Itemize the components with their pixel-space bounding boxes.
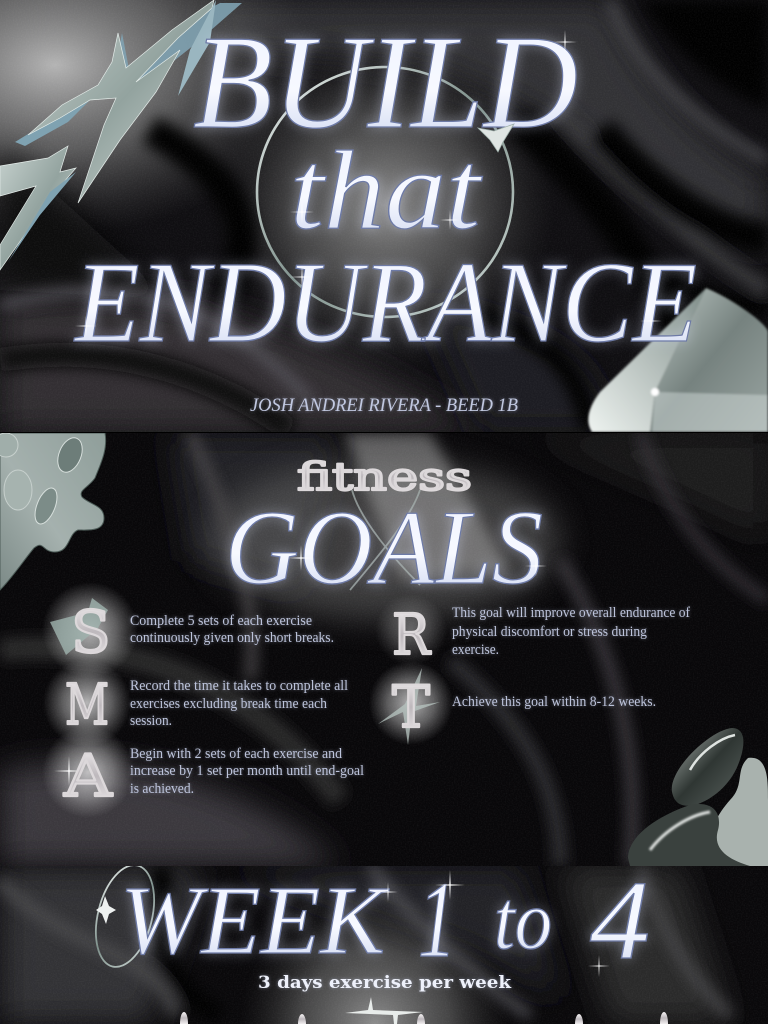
satin background [0,433,768,866]
goal M: measurable: Record the time it takes to complete all [130,678,348,694]
panel: fitness goals [0,433,768,866]
goal R: relevant: exercise. [452,642,499,658]
goal A: achievable: is achieved. [130,781,194,797]
heading: BUILD: BUILD [193,8,578,156]
goal M: measurable: M [65,673,109,738]
panel: title cover [0,0,768,432]
goal M: measurable: session. [130,713,172,729]
goal M: measurable [43,659,348,747]
exercise figures tips [180,1012,668,1024]
goal A: achievable: Begin with 2 sets of each exercise and [130,746,343,762]
icon: chrome lightning sculpture [0,0,242,270]
goal S: specific: S [71,598,111,666]
goal A: achievable: increase by 1 set per month until end-goal [130,763,364,779]
goal T: time-bound: Achieve this goal within 8-12 weeks. [452,694,656,710]
heading: WEEK 1 to 4: 4 [590,859,650,983]
icon: chrome clover [628,728,768,866]
goal S: specific [42,582,334,678]
goal A: achievable: A [63,742,113,810]
goal T: time-bound [369,661,656,745]
heading: GOALS: GOALS [225,489,543,606]
icon: chrome cube [588,288,768,432]
goal M: measurable: exercises excluding break time each [130,696,328,712]
sparkles on goals heading [288,545,547,577]
icon: chrome ring with star [94,866,156,968]
goal S: specific: continuously given only short breaks. [130,630,334,646]
heading: WEEK 1 to 4: to [494,874,552,967]
goal R: relevant [378,598,691,662]
icon: chrome blob gear [0,433,106,590]
icon: chrome star [478,124,514,152]
heading: WEEK 1 to 4: WEEK [120,867,390,975]
icon: chrome ring [257,67,513,317]
sparkles on title [75,30,662,337]
goal T: time-bound: T [392,673,430,741]
goal R: relevant: This goal will improve overall endurance of [452,605,690,621]
icon: twisted ring [350,490,420,590]
sparkles on week heading [378,870,610,977]
heading: fitness: fitness [297,455,472,499]
satin background [0,0,768,432]
goal R: relevant: physical discomfort or stress during [452,624,647,640]
goal S: specific: Complete 5 sets of each exercise [130,613,312,629]
heading: WEEK 1 to 4: 1 [418,861,456,980]
icon: chrome star dish [345,997,423,1024]
subtitle: author: JOSH ANDREI RIVERA - BEED 1B [250,396,518,416]
heading: WEEK 1 to 4 [123,877,652,964]
subheading: frequency: 3 days exercise per week [258,973,512,992]
heading: ENDURANCE: ENDURANCE [73,239,697,367]
heading: that: that [290,129,483,253]
satin background [0,866,768,1024]
goal R: relevant: R [392,603,432,668]
panel: week 1 to 4 [0,859,768,1024]
goal A: achievable [42,726,364,818]
